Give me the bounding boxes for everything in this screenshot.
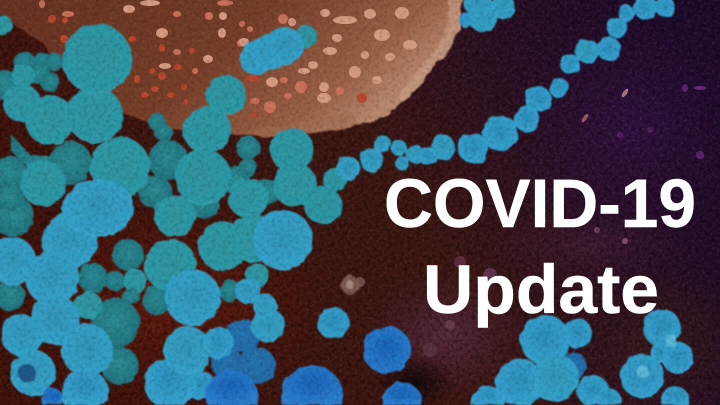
- virus particles: pale particle and isolated blue particles: [317, 276, 422, 405]
- virus particles: central teal cluster: [0, 75, 360, 237]
- title: [384, 165, 696, 328]
- virus particles: beaded chain rising to top right: [360, 0, 675, 172]
- title line: Update: Update: [423, 251, 659, 328]
- background flecks: pale and magenta specks on the surface: [355, 84, 706, 357]
- cell surface: orange-brown mass at top: [0, 0, 464, 137]
- virus particles: blue cluster at lower right: [471, 309, 694, 405]
- virus particle: capsule on the cell surface: [239, 25, 317, 75]
- surface bumps: pink and red spots on the cell: [39, 0, 417, 118]
- virus particles: teal cluster at upper left: [0, 15, 132, 180]
- virus particles: blue-teal cluster at centre left: [0, 179, 196, 396]
- virus particles: elongated mass and chain at centre: [144, 210, 313, 405]
- title line: COVID-19: COVID-19: [384, 165, 696, 242]
- virus particles: dark blue at the bottom edge: [41, 365, 343, 405]
